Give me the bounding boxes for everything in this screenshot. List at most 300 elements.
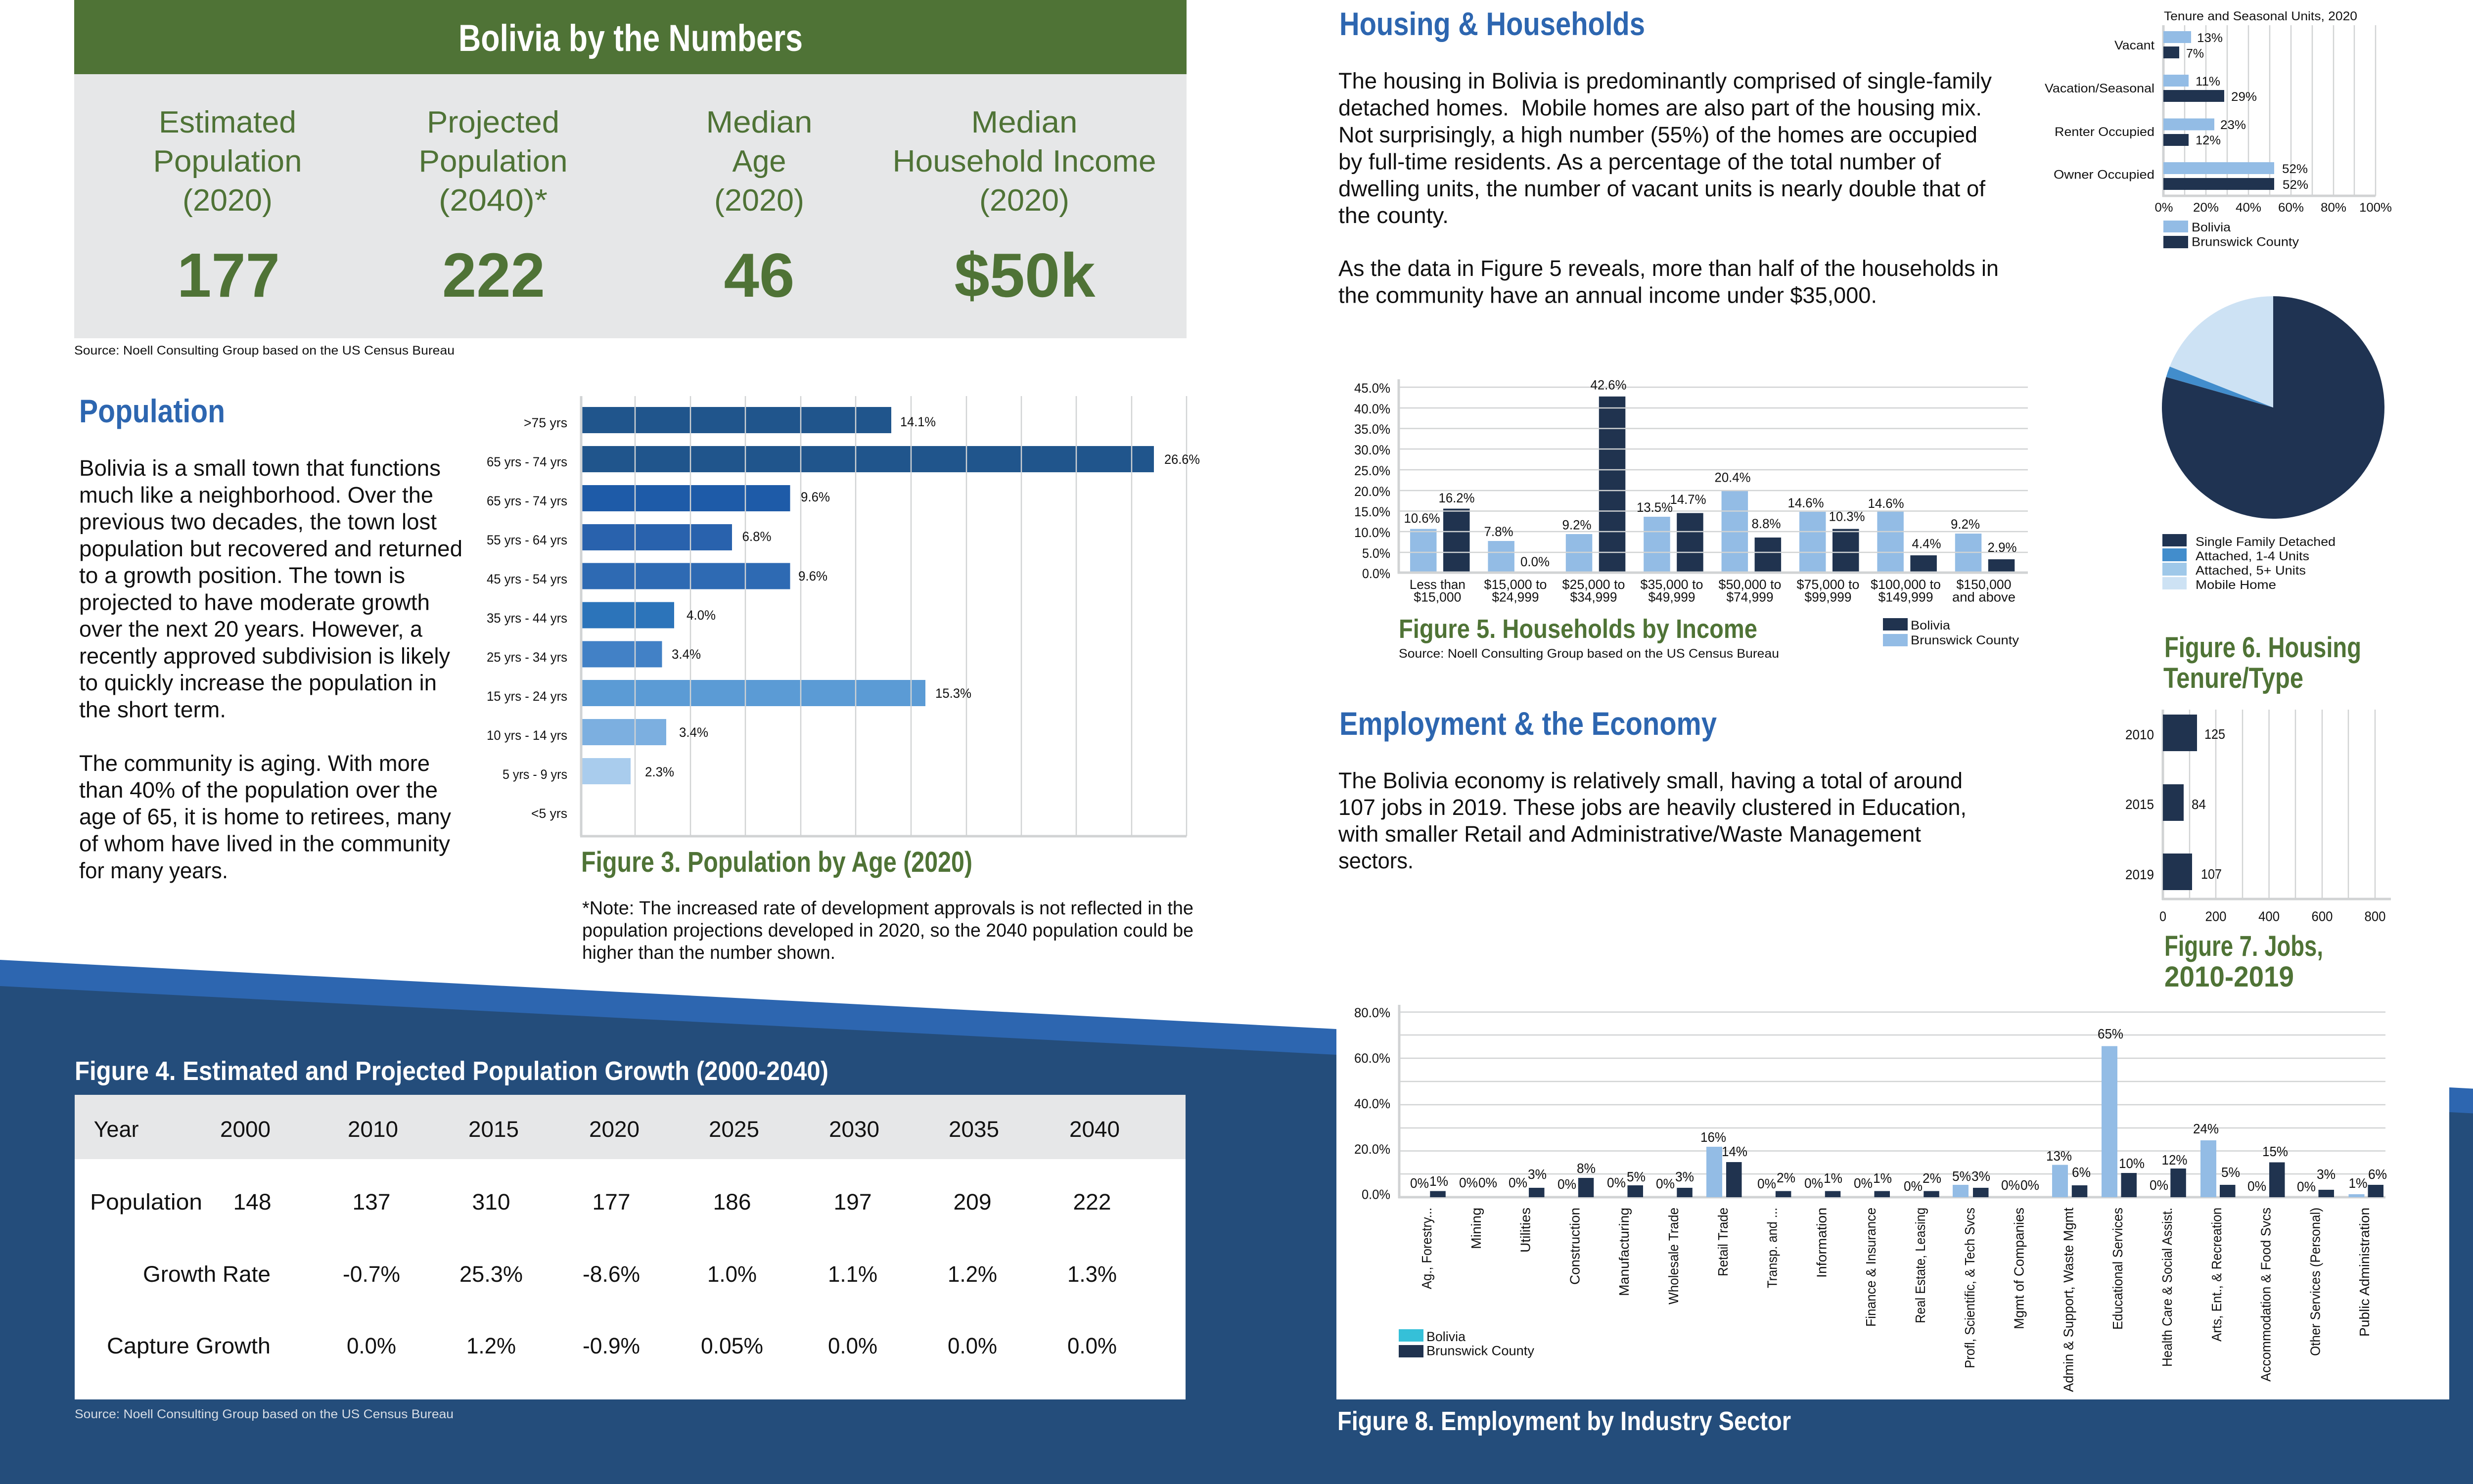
y axis labels: 10.0%: [1354, 525, 1390, 540]
text block: housing narrative: by full-time residents. As a percentage of the total number of: [1338, 149, 1941, 174]
industry value labels: 1%: [1429, 1173, 1448, 1189]
panel: white right panel: [1336, 1029, 2449, 1399]
figure 7 caption: 2010-2019: [2164, 961, 2294, 993]
age value labels: 2.3%: [645, 764, 674, 779]
figure 6 caption: Figure 6. Housing: [2164, 631, 2361, 664]
jobs year labels: 2010: [2125, 727, 2154, 742]
income value labels: 10.3%: [1829, 509, 1865, 524]
tenure x axis labels: 60%: [2278, 201, 2304, 215]
income value labels: 14.7%: [1670, 492, 1706, 507]
capture growth row: 0.0%: [828, 1333, 877, 1358]
population row: 222: [1073, 1189, 1111, 1214]
figure 5 caption: Figure 5. Households by Income: [1399, 614, 1757, 644]
income category labels: $25,000 to: [1562, 577, 1625, 592]
table header row: 2030: [829, 1117, 879, 1142]
income category labels: $35,000 to: [1640, 577, 1703, 592]
age category labels: [487, 415, 567, 821]
industry value labels: 0%: [2020, 1177, 2039, 1193]
industry category labels: Ag., Forestry...: [1419, 1208, 1434, 1289]
jobs value labels: [2192, 726, 2225, 882]
growth rate row: -0.7%: [343, 1261, 400, 1287]
industry category labels: Utilities: [1518, 1208, 1533, 1253]
jobs year labels: 2015: [2125, 797, 2154, 812]
panel: Bolivia by the Numbers: [74, 0, 1187, 338]
income value labels: 20.4%: [1714, 470, 1751, 485]
stat: median age: [706, 105, 812, 310]
stat: median household income: [892, 105, 1156, 310]
bar chart: population by age: [487, 396, 1200, 836]
y axis labels: [1354, 381, 1390, 581]
industry legend: Bolivia: [1426, 1329, 1466, 1344]
table header row: 2000: [220, 1117, 271, 1142]
source note: Source: Noell Consulting Group based on the US Census Bureau: [74, 344, 455, 358]
income value labels: 42.6%: [1591, 378, 1626, 393]
tenure value labels: 29%: [2231, 90, 2257, 104]
population row: Population: [90, 1189, 202, 1214]
age category labels: <5 yrs: [531, 806, 567, 821]
industry y axis labels: 80.0%: [1354, 1005, 1390, 1020]
jobs x axis labels: 0: [2159, 909, 2166, 924]
text block: housing narrative: the community have an annual income under $35,000.: [1338, 283, 1877, 308]
y axis labels: 45.0%: [1354, 381, 1390, 396]
table: population growth: [75, 1095, 1186, 1399]
tenure legend: [2163, 221, 2299, 249]
income category labels: $149,999: [1878, 589, 1933, 604]
income category labels: and above: [1952, 589, 2015, 604]
industry legend: Brunswick County: [1426, 1343, 1534, 1358]
income category labels: $100,000 to: [1871, 577, 1941, 592]
income category labels: $15,000 to: [1484, 577, 1547, 592]
bar chart: households by income: [1354, 378, 2028, 604]
income category labels: $34,999: [1570, 589, 1617, 604]
age value labels: 6.8%: [742, 529, 772, 544]
bar chart: tenure and seasonal units: [2045, 9, 2392, 249]
tenure category labels: [2045, 39, 2154, 182]
industry value labels: 0%: [1804, 1175, 1823, 1191]
jobs year labels: 2019: [2125, 867, 2154, 882]
tenure value labels: 23%: [2220, 118, 2246, 132]
y axis labels: 20.0%: [1354, 484, 1390, 499]
income value labels: 9.2%: [1951, 517, 1980, 532]
industry value labels: 0%: [2247, 1178, 2266, 1194]
tenure value labels: 7%: [2186, 46, 2204, 60]
figure 6 caption: [2163, 631, 2361, 694]
income value labels: 14.6%: [1868, 496, 1904, 511]
y axis labels: 5.0%: [1362, 546, 1390, 561]
age value labels: 14.1%: [900, 414, 936, 429]
population row: [90, 1189, 1111, 1214]
population row: 148: [233, 1189, 271, 1214]
industry category labels: Wholesale Trade: [1666, 1208, 1681, 1304]
tenure x axis labels: 100%: [2359, 201, 2392, 215]
industry category labels: Other Services (Personal): [2307, 1208, 2323, 1356]
pie legend: Mobile Home: [2196, 578, 2276, 592]
industry legend: [1399, 1329, 1534, 1358]
industry value labels: 0%: [1904, 1178, 1923, 1194]
tenure category labels: Renter Occupied: [2055, 125, 2154, 139]
jobs x axis labels: 800: [2364, 909, 2386, 924]
age value labels: 15.3%: [935, 686, 971, 701]
age category labels: 55 yrs - 64 yrs: [487, 533, 567, 547]
income value labels: 16.2%: [1438, 491, 1475, 505]
industry category labels: Admin & Support, Waste Mgmt: [2061, 1208, 2076, 1392]
bar chart: employment by industry: [1354, 1005, 2387, 1392]
industry value labels: 0%: [2297, 1179, 2316, 1194]
age value labels: [645, 414, 1200, 779]
tenure category labels: Owner Occupied: [2054, 168, 2154, 182]
income value labels: 14.6%: [1787, 495, 1824, 510]
growth rate row: 1.1%: [828, 1261, 877, 1287]
tenure value labels: [2186, 31, 2308, 192]
industry value labels: 16%: [1700, 1129, 1726, 1145]
table header row: 2010: [348, 1117, 398, 1142]
industry value labels: 12%: [2161, 1152, 2187, 1168]
industry value labels: 1%: [1873, 1170, 1892, 1186]
capture growth row: 0.0%: [948, 1333, 997, 1358]
income category labels: Less than: [1410, 577, 1465, 592]
figure 8 caption: Figure 8. Employment by Industry Sector: [1337, 1406, 1791, 1436]
income category labels: $49,999: [1648, 589, 1695, 604]
text block: economy narrative: sectors.: [1338, 848, 1414, 873]
text block: housing narrative: The housing in Bolivia is predominantly comprised of single-family: [1338, 68, 1992, 93]
industry value labels: [1410, 1026, 2387, 1194]
table source note: Source: Noell Consulting Group based on the US Census Bureau: [75, 1407, 454, 1421]
stat: projected population: (2040)*: [439, 183, 548, 218]
tenure value labels: 11%: [2196, 75, 2220, 89]
age category labels: 65 yrs - 74 yrs: [487, 454, 567, 469]
industry value labels: 8%: [1577, 1161, 1596, 1176]
table header row: 2035: [949, 1117, 999, 1142]
tenure value labels: 52%: [2283, 178, 2308, 192]
growth rate row: [143, 1261, 1117, 1287]
text block: population narrative: to quickly increase the population in: [79, 670, 437, 695]
jobs x axis labels: 400: [2258, 909, 2280, 924]
industry y axis labels: 0.0%: [1362, 1187, 1390, 1202]
industry category labels: Finance & Insurance: [1863, 1208, 1878, 1327]
tenure category labels: Vacant: [2114, 39, 2154, 52]
industry value labels: 5%: [1952, 1169, 1971, 1184]
industry value labels: 15%: [2262, 1144, 2288, 1159]
industry value labels: 0%: [2001, 1177, 2020, 1193]
growth rate row: 1.2%: [948, 1261, 997, 1287]
industry category labels: Manufacturing: [1616, 1208, 1632, 1296]
text block: population narrative: recently approved subdivision is likely: [79, 643, 450, 669]
y axis labels: 40.0%: [1354, 402, 1390, 416]
text block: population narrative: projected to have moderate growth: [79, 589, 430, 615]
industry category labels: Real Estate, Leasing: [1913, 1208, 1928, 1323]
text block: population narrative: population but recovered and returned: [79, 536, 462, 561]
age value labels: 9.6%: [801, 490, 830, 504]
industry y axis labels: 20.0%: [1354, 1142, 1390, 1157]
industry value labels: 1%: [2348, 1175, 2367, 1191]
tenure legend: Brunswick County: [2192, 235, 2299, 249]
age category labels: 15 yrs - 24 yrs: [487, 689, 567, 704]
income category labels: [1410, 577, 2015, 604]
tenure x axis labels: 20%: [2193, 201, 2219, 215]
figure 3 caption: Figure 3. Population by Age (2020): [581, 846, 972, 878]
text block: population narrative: the short term.: [79, 697, 226, 722]
jobs value labels: 125: [2204, 726, 2225, 742]
note text: *Note: The increased rate of development approvals is not reflected in the: [582, 898, 1193, 919]
bar chart: jobs 2010-2019: [2125, 710, 2391, 924]
income category labels: $15,000: [1414, 589, 1461, 604]
figure 5 source: Source: Noell Consulting Group based on the US Census Bureau: [1399, 647, 1779, 661]
tenure bars: [2163, 31, 2274, 190]
stat: projected population: Projected: [427, 105, 559, 139]
figure 5 legend: Brunswick County: [1911, 633, 2019, 647]
industry value labels: 0%: [1607, 1175, 1626, 1190]
capture growth row: [107, 1333, 1117, 1358]
age category labels: 10 yrs - 14 yrs: [487, 728, 567, 743]
note text: population projections developed in 2020, so the 2040 population could be: [582, 920, 1193, 941]
industry bars: Brunswick County: [1430, 1162, 2383, 1197]
industry bars: Bolivia: [1706, 1046, 2364, 1197]
capture growth row: 0.0%: [347, 1333, 396, 1358]
population row: 310: [472, 1189, 510, 1214]
text block: population narrative: to a growth position. The town is: [79, 563, 405, 588]
text block: population narrative: [79, 455, 462, 883]
tenure x axis labels: 40%: [2236, 201, 2261, 215]
y axis labels: 0.0%: [1362, 566, 1390, 581]
stat: estimated population: (2020): [183, 183, 273, 218]
income category labels: $50,000 to: [1718, 577, 1782, 592]
note text: higher than the number shown.: [582, 943, 835, 963]
income value labels: 4.4%: [1912, 536, 1941, 551]
y axis labels: 25.0%: [1354, 463, 1390, 478]
heading: Housing & Households: Housing & Households: [1339, 5, 1645, 42]
industry category labels: Accommodation & Food Svcs: [2258, 1208, 2274, 1382]
industry value labels: 2%: [1923, 1170, 1941, 1186]
income value labels: 10.6%: [1404, 511, 1440, 526]
bars: [581, 407, 1154, 784]
tenure value labels: 52%: [2282, 162, 2308, 176]
title: Bolivia by the Numbers: [458, 17, 803, 59]
capture growth row: 1.2%: [466, 1333, 516, 1358]
industry value labels: 0%: [1410, 1175, 1429, 1191]
background: blue angled bands: [0, 960, 2473, 1484]
income value labels: 0.0%: [1520, 554, 1550, 569]
text block: economy narrative: The Bolivia economy is relatively small, having a total of around: [1338, 768, 1963, 793]
figure 5 legend: Bolivia: [1911, 619, 1950, 632]
income value labels: [1404, 378, 2017, 569]
industry value labels: 1%: [1824, 1170, 1842, 1186]
jobs x axis labels: [2159, 909, 2386, 924]
age category labels: 25 yrs - 34 yrs: [487, 650, 567, 665]
y axis labels: 35.0%: [1354, 422, 1390, 437]
text block: population narrative: The community is aging. With more: [79, 751, 430, 776]
industry category labels: Mining: [1468, 1208, 1484, 1249]
text block: housing narrative: the county.: [1338, 203, 1449, 228]
income category labels: $24,999: [1492, 589, 1539, 604]
age category labels: 5 yrs - 9 yrs: [503, 767, 567, 782]
industry category labels: Educational Services: [2110, 1208, 2125, 1330]
industry value labels: 0%: [1557, 1176, 1576, 1192]
stat: median household income: (2020): [979, 183, 1069, 218]
jobs x axis labels: 200: [2205, 909, 2227, 924]
pie legend: Attached, 1-4 Units: [2196, 549, 2309, 563]
stat: median household income: Household Income: [892, 144, 1156, 179]
text block: population narrative: much like a neighborhood. Over the: [79, 483, 433, 507]
income category labels: $99,999: [1804, 589, 1852, 604]
text block: economy narrative: 107 jobs in 2019. These jobs are heavily clustered in Education,: [1338, 795, 1967, 820]
text block: population narrative: Bolivia is a small town that functions: [79, 455, 441, 481]
population row: 209: [954, 1189, 991, 1214]
industry value labels: 13%: [2046, 1148, 2072, 1164]
population row: 177: [593, 1189, 630, 1214]
pie chart: housing type: [2162, 296, 2384, 519]
income category labels: $150,000: [1957, 577, 2011, 592]
heading: Population: Population: [79, 393, 225, 429]
text block: housing narrative: [1338, 68, 1999, 308]
text block: population narrative: for many years.: [79, 858, 228, 883]
industry value labels: 3%: [1675, 1169, 1694, 1184]
industry category labels: Mgmt of Companies: [2012, 1208, 2027, 1329]
stat: median age: (2020): [714, 183, 804, 218]
text block: economy narrative: [1338, 768, 1967, 873]
y axis labels: 30.0%: [1354, 443, 1390, 457]
industry value labels: 3%: [1528, 1167, 1547, 1182]
industry value labels: 6%: [2368, 1167, 2387, 1182]
income bars: [1410, 397, 2015, 573]
age category labels: 65 yrs - 74 yrs: [487, 494, 567, 508]
industry value labels: 10%: [2119, 1156, 2145, 1171]
tenure value labels: 12%: [2196, 134, 2221, 147]
income category labels: $74,999: [1726, 589, 1774, 604]
industry category labels: Retail Trade: [1715, 1208, 1731, 1276]
heading: Employment & the Economy: Employment & the Economy: [1339, 705, 1717, 742]
income value labels: 13.5%: [1637, 500, 1673, 515]
industry y axis labels: [1354, 1005, 1390, 1202]
figure 7 caption: [2164, 930, 2323, 993]
jobs year labels: [2125, 727, 2154, 882]
industry y axis labels: 40.0%: [1354, 1096, 1390, 1111]
tenure x axis labels: 0%: [2154, 201, 2173, 215]
tenure category labels: Vacation/Seasonal: [2045, 82, 2154, 95]
industry value labels: 3%: [2317, 1167, 2336, 1182]
stat: projected population: 222: [442, 240, 545, 310]
industry category labels: Public Administration: [2357, 1208, 2372, 1337]
jobs x axis labels: 600: [2312, 909, 2333, 924]
industry value labels: 5%: [1627, 1169, 1646, 1184]
industry value labels: 0%: [1854, 1175, 1873, 1191]
age value labels: 4.0%: [687, 608, 716, 623]
figure 5 legend: [1883, 618, 2019, 647]
stat: estimated population: Population: [153, 144, 302, 179]
figure 7 caption: Figure 7. Jobs,: [2164, 930, 2323, 962]
text block: housing narrative: Not surprisingly, a high number (55%) of the homes are occupied: [1338, 122, 1977, 147]
growth rate row: 25.3%: [459, 1261, 523, 1287]
capture growth row: 0.05%: [701, 1333, 763, 1358]
industry value labels: 0%: [1459, 1175, 1478, 1190]
age value labels: 3.4%: [679, 725, 708, 740]
figure 6 caption: Tenure/Type: [2163, 662, 2303, 694]
industry value labels: 5%: [2221, 1165, 2240, 1180]
population row: 137: [352, 1189, 391, 1214]
age value labels: 9.6%: [798, 569, 827, 584]
text block: population narrative: of whom have lived in the community: [79, 831, 451, 856]
text block: housing narrative: As the data in Figure 5 reveals, more than half of the households in: [1338, 256, 1999, 281]
industry value labels: 14%: [1722, 1144, 1747, 1159]
stat: median age: 46: [724, 240, 794, 310]
industry category labels: Information: [1814, 1208, 1829, 1278]
pie legend: Attached, 5+ Units: [2196, 564, 2306, 578]
industry value labels: 0%: [1757, 1176, 1776, 1191]
industry value labels: 3%: [1971, 1169, 1990, 1184]
note text: [582, 898, 1193, 963]
table header row: 2040: [1069, 1117, 1120, 1142]
tenure value labels: 13%: [2197, 31, 2223, 45]
pie legend: [2162, 534, 2336, 592]
industry category labels: Transp. and ...: [1765, 1208, 1780, 1288]
growth rate row: -8.6%: [583, 1261, 640, 1287]
stat: median household income: Median: [971, 105, 1077, 139]
text block: population narrative: than 40% of the population over the: [79, 777, 438, 803]
growth rate row: 1.3%: [1067, 1261, 1117, 1287]
stat: median household income: $50k: [955, 240, 1096, 310]
text block: economy narrative: with smaller Retail and Administrative/Waste Management: [1338, 821, 1921, 847]
table header row: Year: [94, 1117, 138, 1142]
age value labels: 3.4%: [672, 647, 701, 662]
industry y axis labels: 60.0%: [1354, 1051, 1390, 1066]
text block: population narrative: over the next 20 years. However, a: [79, 617, 423, 642]
industry category labels: Health Care & Social Assist.: [2159, 1208, 2175, 1367]
industry value labels: 2%: [1777, 1170, 1795, 1185]
stat: projected population: [418, 105, 568, 310]
income category labels: $75,000 to: [1796, 577, 1860, 592]
industry category labels: Profl, Scientific, & Tech Svcs: [1962, 1208, 1977, 1368]
industry category labels: Arts, Ent., & Recreation: [2209, 1208, 2224, 1342]
table header row: 2020: [589, 1117, 640, 1142]
text block: housing narrative: detached homes. Mobile homes are also part of the housing mix.: [1338, 95, 1982, 120]
tenure x axis labels: [2154, 201, 2392, 215]
stat: median age: Age: [732, 144, 786, 179]
capture growth row: -0.9%: [583, 1333, 640, 1358]
jobs value labels: 107: [2201, 866, 2222, 882]
text block: population narrative: previous two decades, the town lost: [79, 509, 437, 535]
stat: projected population: Population: [418, 144, 568, 179]
tenure chart title: Tenure and Seasonal Units, 2020: [2164, 9, 2357, 23]
table header row: [94, 1117, 1120, 1142]
age category labels: 45 yrs - 54 yrs: [487, 572, 567, 586]
income value labels: 2.9%: [1987, 540, 2017, 555]
industry value labels: 0%: [2150, 1177, 2168, 1193]
text block: population narrative: age of 65, it is home to retirees, many: [79, 804, 451, 829]
industry category labels: [1419, 1208, 2372, 1392]
industry value labels: 65%: [2098, 1026, 2123, 1041]
table header row: 2015: [468, 1117, 519, 1142]
tenure x axis labels: 80%: [2321, 201, 2346, 215]
income value labels: 9.2%: [1562, 517, 1592, 532]
jobs bars: [2163, 715, 2197, 890]
stat: estimated population: Estimated: [159, 105, 296, 139]
stat: median age: Median: [706, 105, 812, 139]
pie legend: Single Family Detached: [2196, 535, 2336, 549]
income value labels: 8.8%: [1752, 516, 1781, 531]
industry value labels: 0%: [1478, 1175, 1497, 1190]
industry value labels: 24%: [2193, 1121, 2219, 1136]
industry value labels: 0%: [1656, 1176, 1675, 1191]
y axis labels: 15.0%: [1354, 504, 1390, 519]
age category labels: 35 yrs - 44 yrs: [487, 611, 567, 626]
growth rate row: 1.0%: [707, 1261, 757, 1287]
age value labels: 26.6%: [1164, 452, 1200, 467]
capture growth row: Capture Growth: [107, 1333, 271, 1358]
growth rate row: Growth Rate: [143, 1261, 271, 1287]
age category labels: >75 yrs: [524, 415, 567, 430]
industry value labels: 0%: [1509, 1175, 1527, 1190]
stat: estimated population: 177: [177, 240, 280, 310]
income value labels: 7.8%: [1484, 524, 1513, 539]
